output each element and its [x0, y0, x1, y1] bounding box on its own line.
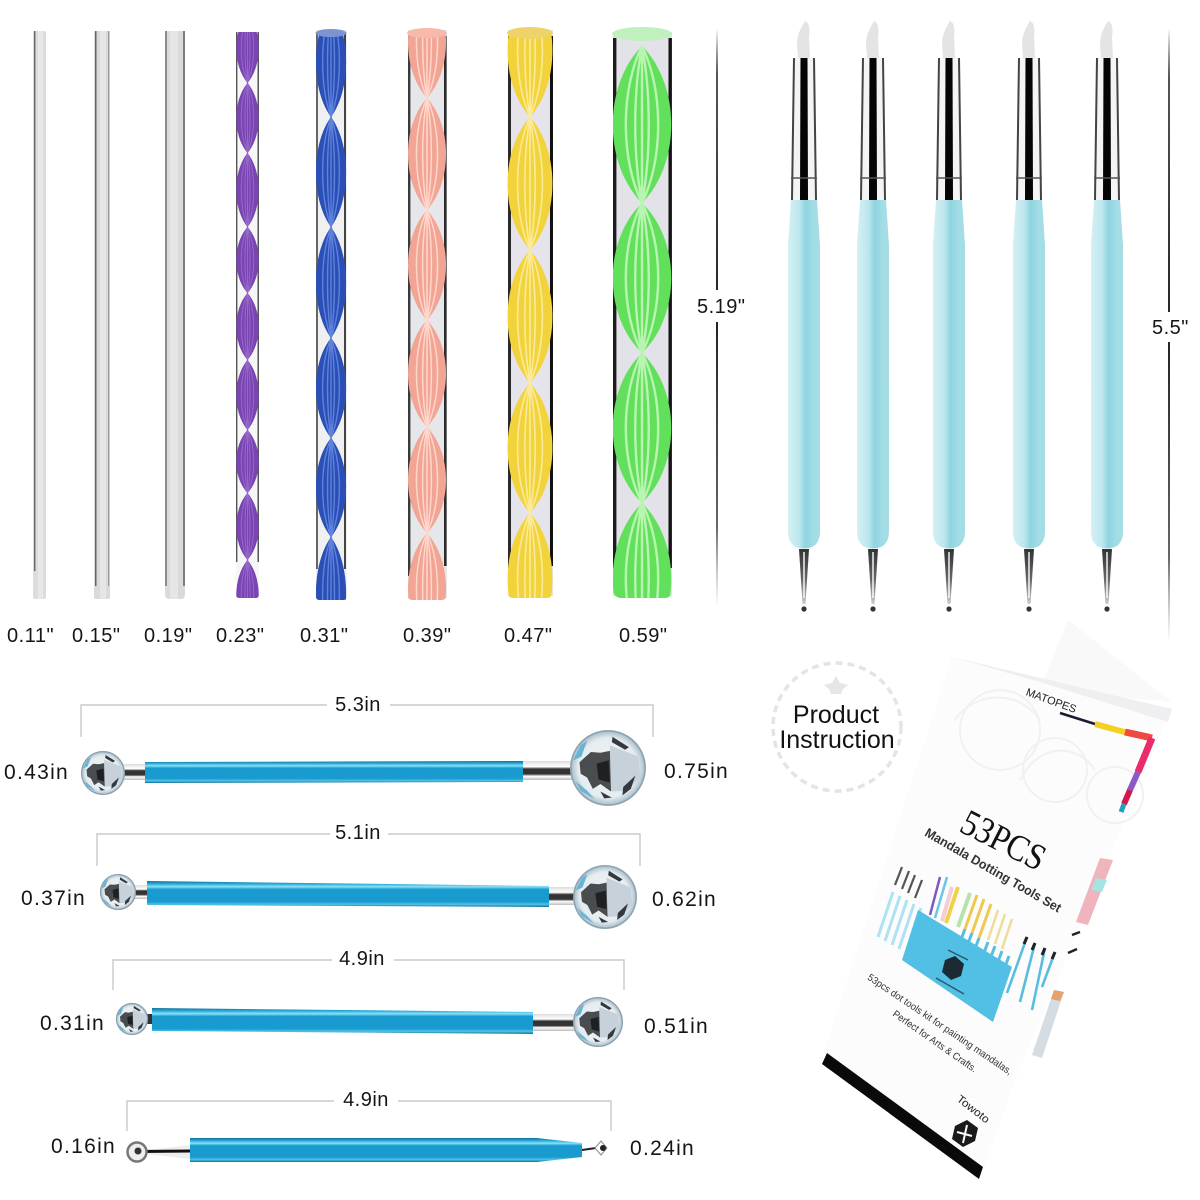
brand mark [952, 1093, 992, 1147]
brush 2 [857, 21, 889, 612]
panel: instruction booklet: Perfect for Arts & Crafts. [890, 1009, 979, 1075]
rod diameter labels: 0.15" [72, 625, 121, 647]
tool 1: 0.43in [4, 761, 69, 784]
rod diameter labels [7, 625, 668, 647]
icon: fleur-de-lis [824, 676, 848, 694]
length bracket 5.3in [81, 705, 653, 737]
panel: instruction booklet [822, 620, 1172, 1179]
tool 3: 0.51in [644, 1015, 709, 1038]
grey-blue side strip [1032, 990, 1064, 1058]
badge: product instruction [773, 663, 901, 791]
tool 4: 0.24in [630, 1137, 695, 1160]
rod diameter labels: 0.31" [300, 625, 349, 647]
brush 1 [788, 21, 820, 612]
brand mark: Towoto [954, 1093, 992, 1126]
rod length dimension [690, 28, 754, 608]
description text: 53pcs dot tools kit for painting mandalas, [865, 972, 1014, 1078]
rod 0.15 inch [94, 31, 110, 599]
rod 0.23 inch purple [236, 13, 259, 630]
rod 0.39 inch pink [407, 28, 447, 600]
brush 4 [1013, 21, 1045, 612]
rod length dimension: 5.19" [697, 296, 746, 318]
tool 3 [40, 948, 709, 1047]
tool 3: 4.9in [339, 948, 385, 970]
brush 3 [933, 21, 965, 612]
length bracket 4.9in [127, 1101, 611, 1131]
badge: product instruction: Instruction [779, 726, 895, 754]
colored corner strip [1060, 713, 1152, 812]
tool 4: 0.16in [51, 1135, 116, 1158]
tool 2: 0.37in [21, 887, 86, 910]
tool 4 [51, 1089, 695, 1162]
badge: product instruction: Product [793, 701, 879, 729]
tool 1: 0.75in [664, 760, 729, 783]
rod 0.31 inch blue [316, 29, 347, 600]
front page [823, 657, 1172, 1179]
tool 2: 0.62in [652, 888, 717, 911]
rod diameter labels: 0.47" [504, 625, 553, 647]
faint mandala pattern [955, 690, 1143, 823]
panel: ball stylus tools [4, 694, 729, 1162]
brush length dimension: 5.5" [1152, 317, 1189, 339]
rod diameter labels: 0.39" [403, 625, 452, 647]
tool 3: 0.31in [40, 1012, 105, 1035]
back flap [1040, 620, 1172, 702]
brush 5 [1091, 21, 1123, 612]
panel: double-ended brushes [788, 21, 1123, 612]
subtitle: Mandala Dotting Tools Set [922, 825, 1065, 916]
pouch logo [936, 950, 968, 994]
panel: acrylic rods [33, 27, 672, 600]
top shaded band [952, 657, 1172, 722]
length bracket 5.1in [97, 834, 640, 866]
rod diameter labels: 0.59" [619, 625, 668, 647]
rod 0.59 inch green [612, 27, 672, 655]
rod diameter labels: 0.11" [7, 625, 54, 647]
top heading text: MATOPES [1024, 687, 1078, 716]
tool 1: 5.3in [335, 694, 381, 716]
blue pouch [902, 910, 1012, 1022]
tool 2: 5.1in [335, 822, 381, 844]
rod diameter labels: 0.23" [216, 625, 265, 647]
rod 0.47 inch yellow [507, 27, 553, 598]
tool 4: 4.9in [343, 1089, 389, 1111]
rod 0.11 inch [33, 31, 46, 599]
title: 53PCS [954, 802, 1053, 879]
rod diameter labels: 0.19" [144, 625, 193, 647]
brush length dimension [1146, 28, 1200, 643]
black bottom band [822, 1053, 983, 1179]
tool stripes illustration [878, 867, 1055, 1010]
tool 2 [21, 822, 717, 929]
length bracket 4.9in [113, 960, 624, 990]
rod 0.19 inch [165, 31, 185, 599]
pink side strip [1068, 858, 1113, 953]
tool 1 [4, 694, 729, 806]
